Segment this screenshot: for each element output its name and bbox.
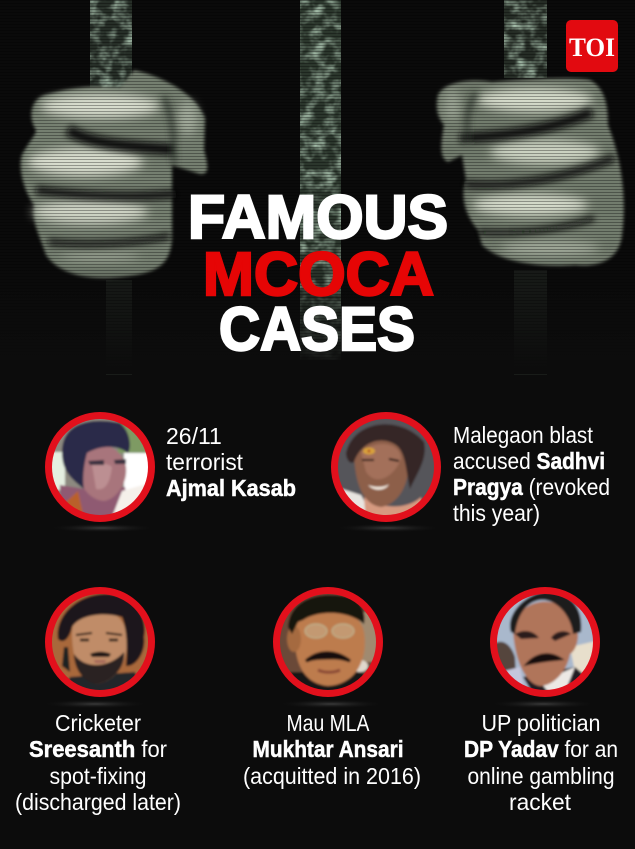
caption: Ajmal Kasab: Ajmal Kasab — [166, 475, 296, 501]
caption: DP Yadav: UP politician — [482, 710, 600, 736]
caption: Mukhtar Ansari: Mau MLA — [286, 710, 370, 736]
caption: Sadhvi Pragya — [453, 422, 610, 526]
caption: DP Yadav: online gambling — [468, 763, 614, 789]
caption: Sreesanth: (discharged later) — [15, 789, 181, 815]
caption: Sadhvi Pragya: Malegaon blast — [453, 422, 594, 448]
scan-line texture — [0, 0, 635, 370]
caption: Sreesanth: spot-fixing — [50, 763, 146, 789]
caption: Sreesanth — [15, 710, 181, 815]
caption: Ajmal Kasab: terrorist — [166, 449, 244, 475]
title: CASES — [219, 295, 415, 363]
title — [188, 183, 448, 363]
caption: DP Yadav — [464, 710, 618, 815]
photo: hands gripping prison bars — [0, 0, 635, 375]
caption: Ajmal Kasab: 26/11 — [166, 423, 222, 449]
caption: DP Yadav: DP Yadav for an — [464, 736, 618, 762]
portrait: Ajmal Kasab — [45, 412, 156, 527]
caption: Sadhvi Pragya: this year) — [453, 500, 540, 526]
caption: Sreesanth: Cricketer — [55, 710, 141, 736]
portrait: Sreesanth — [45, 587, 155, 697]
portrait: DP Yadav — [490, 587, 600, 697]
caption: DP Yadav: racket — [509, 789, 572, 815]
logo: TOI — [566, 20, 618, 72]
caption: Mukhtar Ansari: Mukhtar Ansari — [252, 736, 404, 762]
right fist — [437, 78, 624, 266]
caption: Ajmal Kasab — [166, 423, 296, 501]
title: MCOCA — [203, 240, 434, 308]
caption: Mukhtar Ansari: (acquitted in 2016) — [243, 763, 421, 789]
caption: Mukhtar Ansari — [243, 710, 421, 789]
shadows under portraits — [41, 524, 597, 708]
portrait: Sadhvi Pragya — [331, 412, 441, 522]
title: FAMOUS — [188, 183, 448, 251]
bottom fade — [0, 262, 635, 374]
caption: Sreesanth: Sreesanth for — [29, 736, 167, 762]
left fist — [21, 70, 207, 278]
logo: TOI: TOI — [569, 33, 615, 62]
caption: Sadhvi Pragya: Pragya (revoked — [453, 474, 610, 500]
prison bars — [90, 0, 547, 375]
caption: Sadhvi Pragya: accused Sadhvi — [453, 448, 605, 474]
portrait: Mukhtar Ansari — [273, 587, 383, 697]
